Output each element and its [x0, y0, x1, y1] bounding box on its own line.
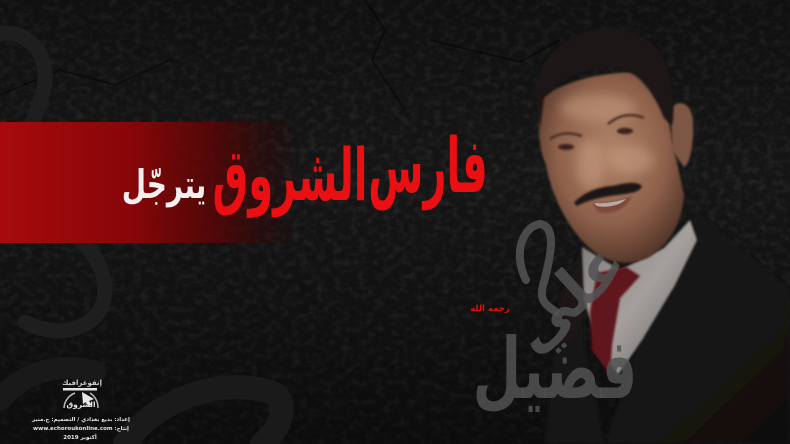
- background calligraphic swirl, left: [0, 33, 282, 444]
- moustache: [574, 183, 642, 206]
- tie: [590, 267, 640, 375]
- face: [539, 72, 684, 263]
- ear: [671, 103, 693, 167]
- logo arc: [64, 393, 98, 408]
- footer credits: إعداد: بديع بغدادي / التصميم: ج.منير: [31, 417, 130, 423]
- shirt collar: [582, 220, 697, 375]
- footer credits: [31, 417, 130, 441]
- footer credits: www.echoroukonline.com :إنتاج: [33, 426, 129, 432]
- footer credits: أكتوبر 2019: [63, 433, 97, 441]
- eyes: [558, 128, 633, 150]
- smile: [592, 196, 632, 213]
- caption: rahimahu Allah: رحمه الله: [470, 304, 510, 314]
- hair: [536, 29, 674, 130]
- logo name: الشروق: [66, 400, 96, 409]
- calligraphic name watermark: فضيل: [473, 320, 637, 418]
- forehead and cheek highlights: [560, 94, 654, 189]
- red title banner: [0, 122, 300, 243]
- footer logo: [62, 379, 102, 409]
- title: fares echorouk: الشروق: [213, 133, 367, 219]
- logo bar: [63, 388, 97, 390]
- eyebrows: [550, 115, 644, 139]
- calligraphic name watermark: علي: [495, 225, 640, 367]
- subtitle: yatarajjal: يترجّل: [122, 162, 206, 208]
- title: fares echorouk: فارس: [368, 123, 488, 211]
- logo pointer: [82, 392, 94, 406]
- portrait of the man: [536, 29, 790, 444]
- calligraphic name watermark: [473, 224, 640, 418]
- logo heading: إنفوغرافيك: [62, 379, 102, 387]
- suit: [545, 212, 790, 444]
- title: fares echorouk: [213, 123, 488, 219]
